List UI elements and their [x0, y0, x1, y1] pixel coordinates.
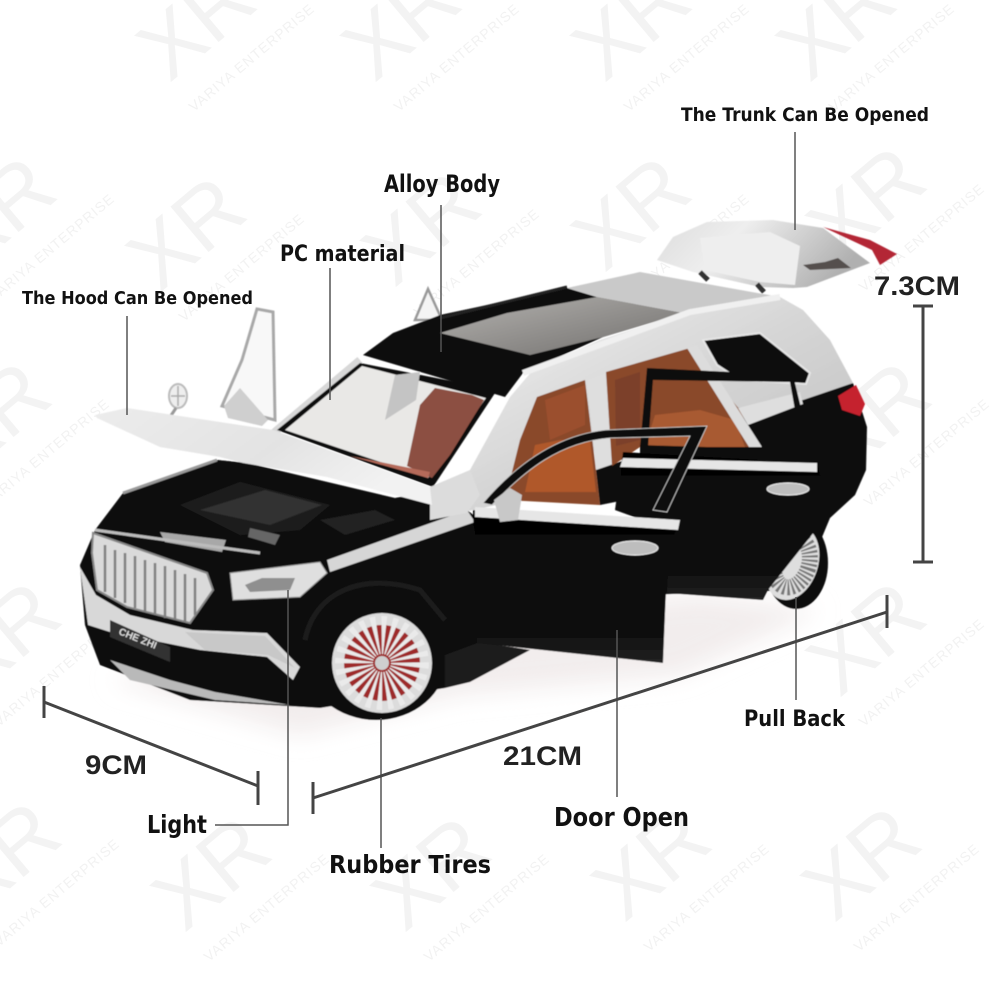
- chrome strip: [620, 458, 817, 472]
- chrome strip: [475, 507, 680, 530]
- engine bay: [117, 460, 403, 557]
- far side door and mirror: [222, 289, 442, 426]
- black roof: [363, 288, 683, 397]
- watermarks: XR: [555, 138, 708, 288]
- dimension: height 7.3CM: [874, 271, 960, 562]
- label: Alloy Body: Alloy Body: [384, 170, 500, 198]
- watermarks: VARIYA ENTERPRISE: [391, 0, 523, 115]
- watermarks: VARIYA ENTERPRISE: [421, 850, 553, 965]
- quarter window: [703, 333, 810, 384]
- open trunk lid: [657, 220, 897, 292]
- watermarks: VARIYA ENTERPRISE: [851, 840, 983, 955]
- side window interior: [505, 345, 806, 505]
- dimension: width 9CM: 9CM: [85, 750, 147, 780]
- watermarks: XR: [110, 158, 263, 308]
- rear door with frame: [615, 368, 823, 600]
- door panel: [615, 452, 823, 600]
- wheel arch: [305, 583, 445, 640]
- C pillar: [687, 345, 762, 447]
- front bumper: [80, 567, 300, 705]
- watermarks: XR: [355, 798, 508, 948]
- watermarks: VARIYA ENTERPRISE: [861, 395, 993, 510]
- front wheel: [305, 583, 446, 720]
- watermarks: VARIYA ENTERPRISE: [411, 205, 543, 320]
- watermarks: VARIYA ENTERPRISE: [176, 210, 308, 325]
- windshield with frame and seat: [270, 360, 497, 487]
- number plate: [110, 620, 170, 662]
- dark lower area: [596, 455, 640, 505]
- dimension: width 9CM: [44, 686, 258, 805]
- front black body: [80, 460, 480, 708]
- label: Light: Light: [147, 810, 207, 839]
- rear body lower black: [640, 383, 867, 595]
- handle: [767, 483, 809, 495]
- watermarks: XR: [135, 798, 288, 948]
- label: PC material: PC material: [280, 242, 405, 267]
- near open door: [473, 426, 707, 663]
- watermarks: XR: [790, 128, 943, 278]
- watermarks: VARIYA ENTERPRISE: [621, 0, 753, 115]
- label: Light: [147, 590, 288, 839]
- rear wheel: [756, 517, 828, 609]
- watermarks: VARIYA ENTERPRISE: [826, 0, 958, 115]
- grille: [92, 533, 213, 623]
- watermarks: XR: [795, 343, 948, 493]
- rear door opening: [606, 348, 757, 466]
- label: Door Open: Door Open: [554, 803, 689, 833]
- door panel: [473, 510, 680, 663]
- engine bay and front body: [80, 460, 480, 708]
- label: The Trunk Can Be Opened: The Trunk Can Be Opened: [681, 104, 929, 126]
- black area behind rear door: [757, 425, 806, 450]
- watermarks: XR: [785, 788, 938, 938]
- lower window sill: [640, 445, 805, 453]
- dimension: length 21CM: 21CM: [503, 741, 582, 771]
- dimension: length 21CM: [313, 595, 887, 814]
- watermarks: VARIYA ENTERPRISE: [641, 840, 773, 955]
- silver band behind rear door: [738, 392, 803, 425]
- window frame: [483, 426, 707, 512]
- roof: [363, 272, 780, 397]
- bay edge: [123, 460, 217, 493]
- label: Pull Back: [744, 597, 846, 732]
- side mirror: [494, 488, 522, 522]
- label: Pull Back: Pull Back: [744, 707, 846, 732]
- front door opening: [505, 380, 600, 505]
- watermarks: XR: [345, 153, 498, 303]
- watermarks: XR: [575, 788, 728, 938]
- taillight: [838, 385, 865, 416]
- sunroof glass: [440, 297, 683, 355]
- headlight: [230, 562, 327, 600]
- rim: [332, 613, 432, 713]
- open hood: [95, 408, 432, 505]
- watermarks: VARIYA ENTERPRISE: [856, 615, 988, 730]
- engine parts: [180, 482, 330, 535]
- tire: [306, 600, 446, 720]
- watermarks: VARIYA ENTERPRISE: [856, 180, 988, 295]
- watermarks: XR: [790, 563, 943, 713]
- window frame: [640, 368, 812, 453]
- label: Rubber Tires: Rubber Tires: [329, 850, 491, 879]
- car illustration: [80, 220, 897, 735]
- B pillar: [587, 373, 612, 470]
- sill: [445, 642, 530, 688]
- ground shadow: [110, 595, 820, 735]
- watermarks: VARIYA ENTERPRISE: [186, 0, 318, 115]
- watermarks: VARIYA ENTERPRISE: [621, 190, 753, 305]
- watermarks: VARIYA ENTERPRISE: [201, 850, 333, 965]
- dimension: height 7.3CM: 7.3CM: [874, 271, 960, 301]
- number plate: CHE ZHI: [117, 627, 158, 652]
- handle: [612, 541, 658, 555]
- label: The Hood Can Be Opened: The Hood Can Be Opened: [22, 288, 253, 309]
- chrome belt line: [327, 510, 475, 572]
- silver upper body: [440, 297, 853, 517]
- silver roof rear: [567, 272, 780, 313]
- icon: hood ornament: [168, 384, 187, 420]
